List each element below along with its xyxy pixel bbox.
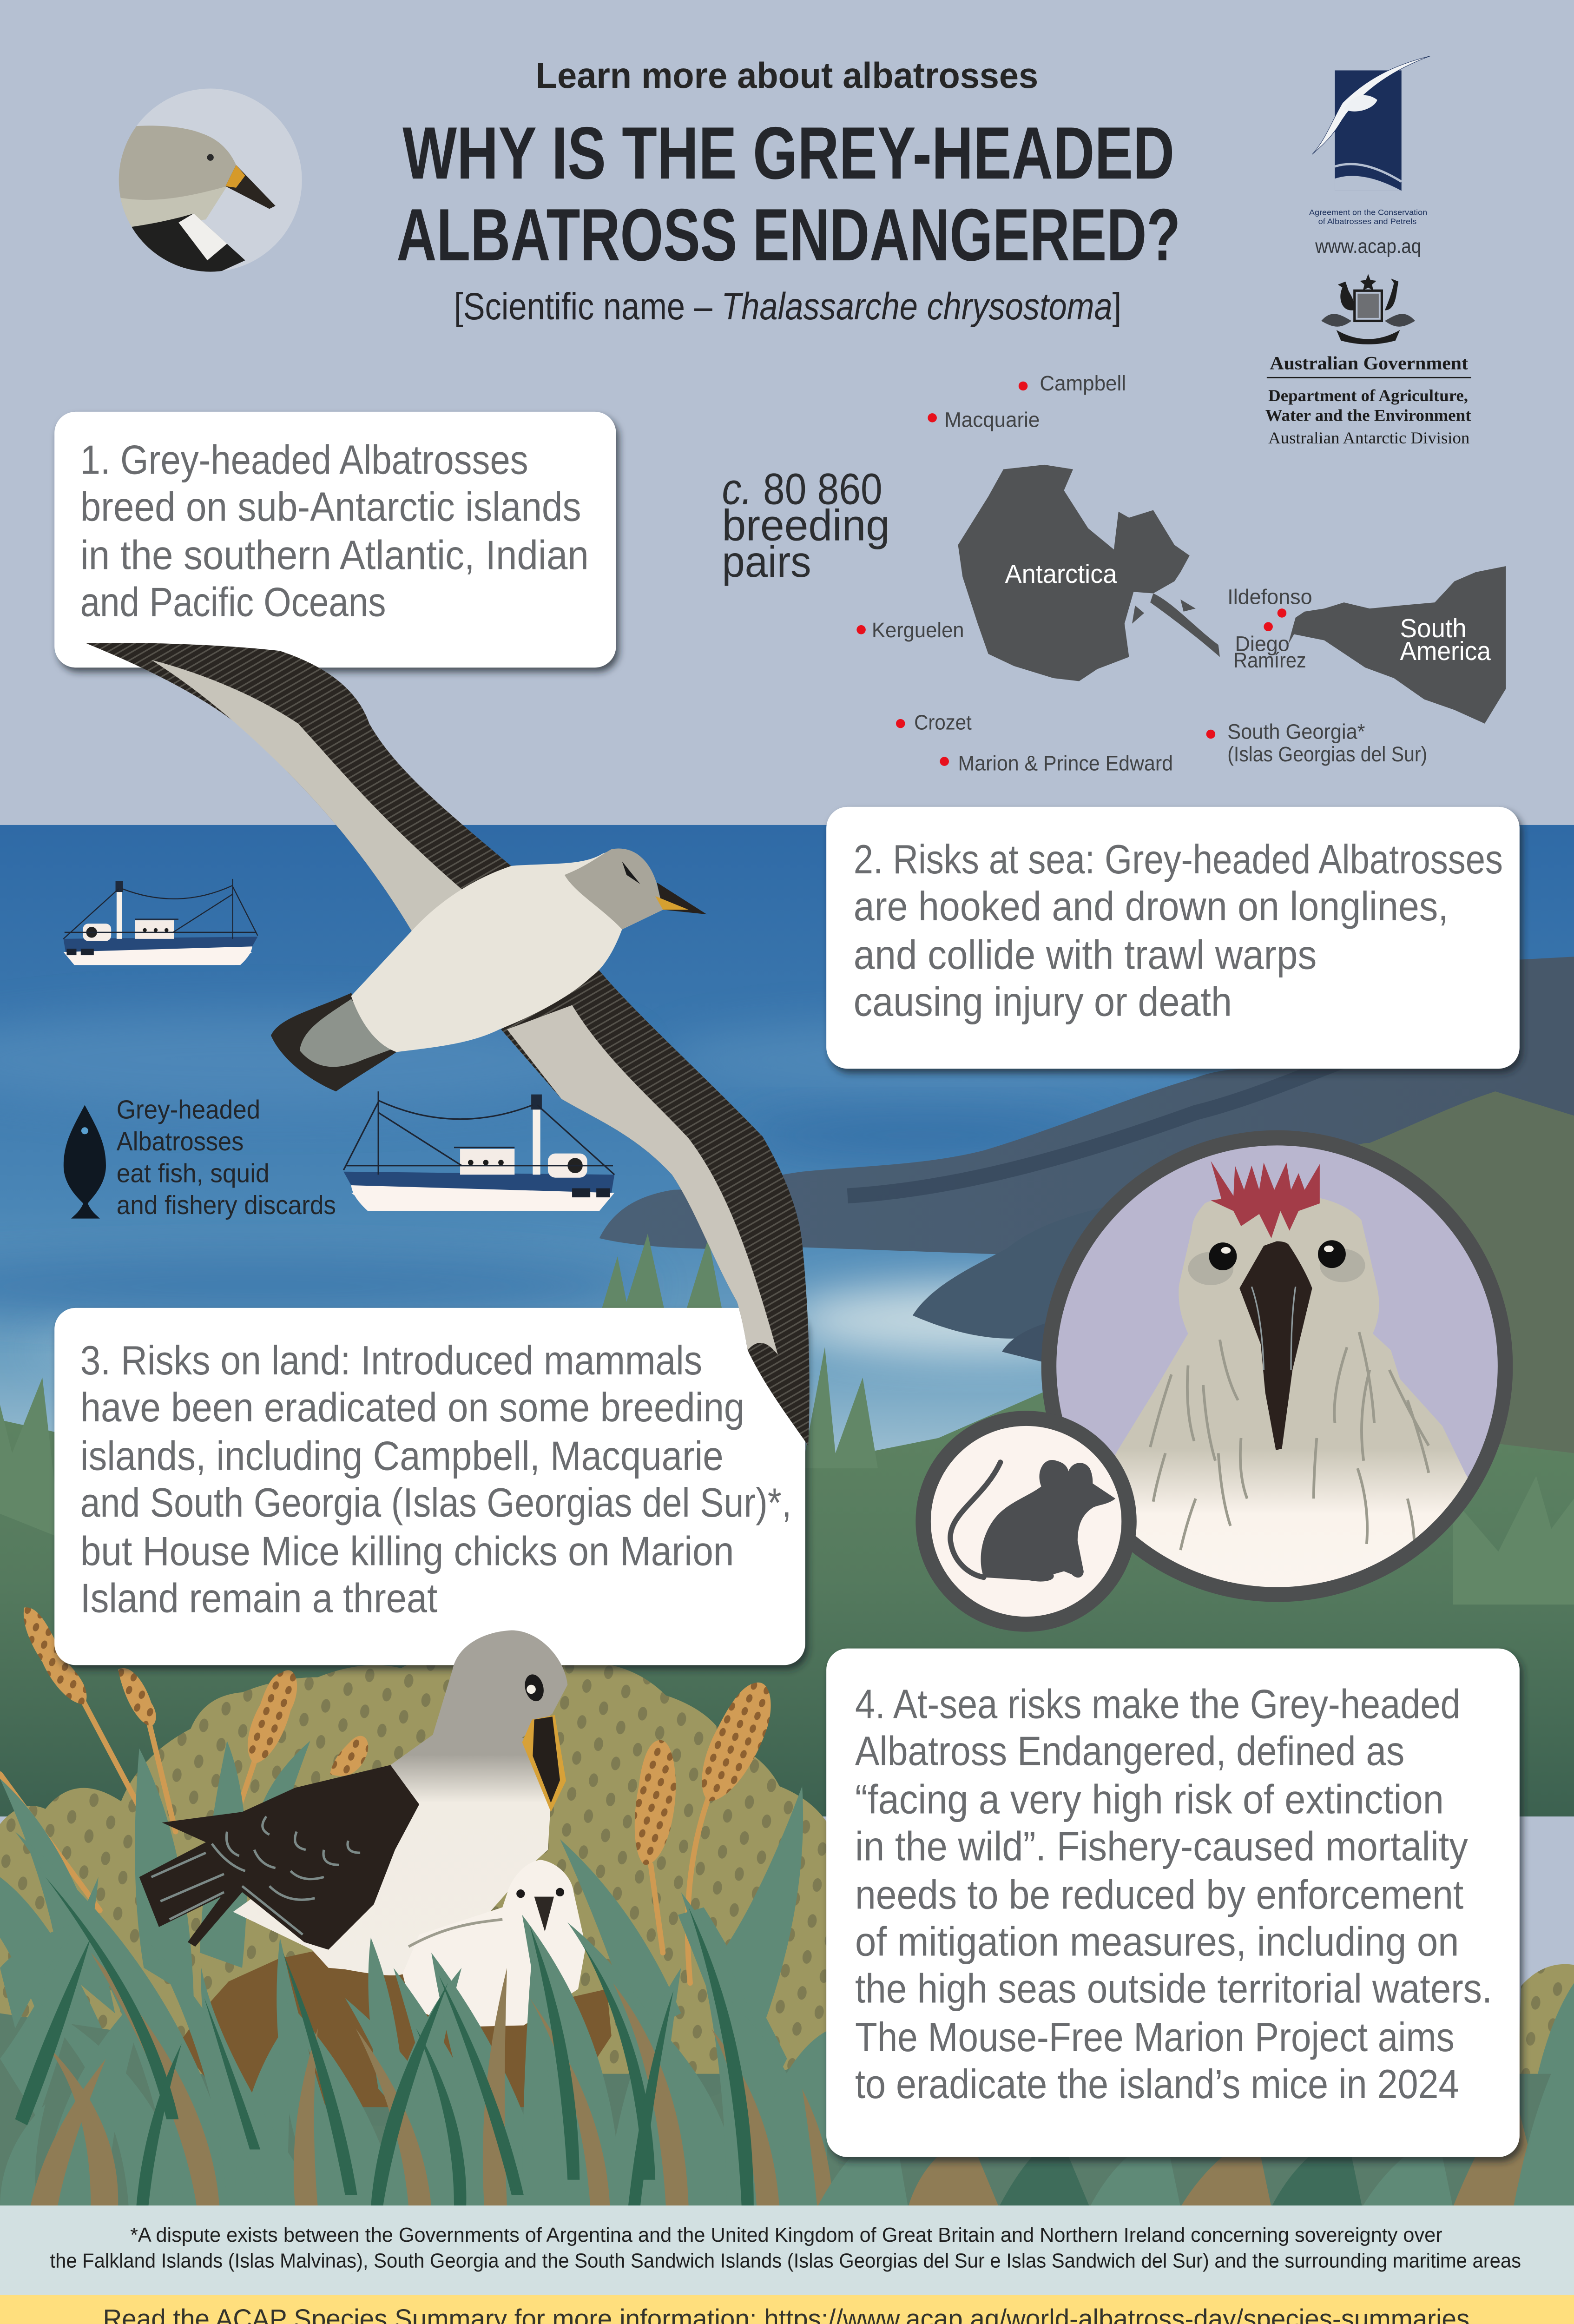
logo: Australian coat of arms [1321,274,1415,344]
logo: Australian Government text [1265,353,1471,447]
panel: text box 1, breeding range: breed on sub-Antarctic islands [80,483,581,529]
panel: text box 3, risks on land: but House Mice killing chicks on Marion [80,1528,734,1574]
panel: text box 4, endangered status: “facing a very high risk of extinction [855,1776,1444,1822]
illustration: back grass blades [0,1741,1574,2180]
panel: text box 2, risks at sea: and collide with trawl warps [854,931,1317,977]
subtitle: scientific name: [Scientific name – Thalassarche chrysostoma] [454,285,1121,328]
title [396,112,1180,276]
panel: footnote band: *A dispute exists between the Governments of Argentina and the United Kingdom of Great Britain and Northern Ireland concerning sovereignty over [130,2224,1442,2246]
panel: text box 4, endangered status: to eradicate the island’s mice in 2024 [855,2061,1459,2107]
illustration: large fishing vessel [343,1091,614,1211]
logo: ACAP: of Albatrosses and Petrels [1318,217,1416,226]
panel: text box 4, endangered status: needs to be reduced by enforcement [855,1872,1463,1918]
panel: text box 2, risks at sea: are hooked and drown on longlines, [854,883,1449,929]
logo: Australian Government text: Water and the Environment [1265,406,1471,424]
map: island markers and labels: Ramírez [1233,648,1306,672]
panel: text box 4, endangered status: Albatross Endangered, defined as [855,1728,1404,1774]
map: island markers and labels: South Georgia* [1227,720,1365,743]
map: island markers and labels [856,371,1427,775]
illustration: small fishing vessel [63,879,257,965]
panel: text box 3, risks on land: Island remain a threat [80,1575,437,1621]
panel: text box 3, risks on land: 3. Risks on land: Introduced mammals [80,1337,702,1383]
logo: Australian Government text: Australian Government [1270,353,1468,374]
panel: text box 4, endangered status [826,1649,1520,2157]
text: diet note: Grey-headed [117,1095,260,1125]
upper wing [86,643,514,931]
panel: text box 4, endangered status: The Mouse-Free Marion Project aims [855,2014,1455,2060]
map: South America [1288,566,1506,724]
title: ALBATROSS ENDANGERED? [396,193,1180,276]
body and head [351,851,663,1052]
mouse silhouette [981,1460,1115,1582]
panel: text box 3, risks on land: have been eradicated on some breeding [80,1384,744,1430]
map: island markers and labels: (Islas Georgias del Sur) [1227,742,1427,766]
text: breeding pairs count: c. 80 860 [722,465,882,514]
text: ACAP website: www.acap.aq [1315,235,1421,257]
tail [271,993,396,1091]
map: Antarctica: Antarctica [1005,559,1117,589]
eye [622,861,640,884]
panel: text box 4, endangered status: of mitigation measures, including on [855,1919,1459,1965]
beak [657,883,707,914]
mouse tail [950,1462,1001,1578]
map: South America: America [1400,636,1491,666]
illustration: chick [402,1860,586,2027]
illustration: green land [0,1234,1574,1816]
map: island markers and labels: Diego [1235,632,1290,655]
text: breeding pairs count: breeding [722,502,890,550]
map: island markers and labels: Marion & Prince Edward [958,752,1173,775]
map: island markers and labels: Kerguelen [872,618,964,642]
panel: text box 2, risks at sea: causing injury or death [854,978,1232,1024]
panel: text box 1, breeding range: 1. Grey-headed Albatrosses [80,436,528,482]
title: WHY IS THE GREY-HEADED [402,112,1174,194]
panel: text box 1, breeding range: in the southern Atlantic, Indian [80,532,589,578]
lower wing [501,969,810,1446]
red crest [1211,1161,1320,1238]
illustration: lower grass bed [0,2013,1574,2210]
text: diet note: and fishery discards [117,1190,336,1220]
logo: ACAP [1309,56,1430,226]
text: diet note [117,1095,336,1220]
panel: text box 4, endangered status: the high seas outside territorial waters. [855,1966,1492,2012]
icon: fish [64,1105,106,1219]
map: island markers and labels: Crozet [914,711,972,734]
illustration: distant rocky headlands [599,957,1574,1529]
text: diet note: eat fish, squid [117,1159,270,1188]
panel: text box 4, endangered status: 4. At-sea risks make the Grey-headed [855,1681,1461,1727]
panel: text box 1, breeding range [54,412,616,667]
panel: text box 4, endangered status: in the wild”. Fishery-caused mortality [855,1823,1468,1869]
map: island markers and labels: Macquarie [944,408,1040,431]
illustration: ocean [0,825,1574,1461]
map: South America: South [1400,614,1467,643]
illustration: adult albatross on nest [139,1631,567,1975]
panel: link band [0,2295,1574,2324]
panel: text box 3, risks on land: and South Georgia (Islas Georgias del Sur)*, [80,1479,791,1525]
map: island markers and labels: Ildefonso [1227,585,1312,608]
text: breeding pairs count: pairs [722,538,811,587]
panel: footnote band: the Falkland Islands (Islas Malvinas), South Georgia and the South Sandwich Islands (Islas Georgias del Sur e Islas Sandwich del Sur) and the surrounding maritime areas [50,2250,1521,2272]
illustration: chick portrait circle [1049,1138,1514,1604]
logo: Australian Government text: Department of Agriculture, [1268,386,1468,405]
panel: text box 3, risks on land [54,1308,805,1665]
panel: text box 1, breeding range: and Pacific Oceans [80,579,386,625]
panel: text box 2, risks at sea [826,807,1520,1069]
logo: ACAP: Agreement on the Conservation [1309,208,1427,217]
map: island markers and labels: Campbell [1040,371,1126,395]
panel: text box 3, risks on land: islands, including Campbell, Macquarie [80,1433,724,1479]
text: diet note: Albatrosses [117,1127,244,1156]
illustration: nest mound [178,1950,612,2107]
icon: mouse circle [923,1419,1129,1624]
illustration: orange reed seed heads [0,1607,771,1983]
logo: Australian Government text: Australian Antarctic Division [1268,429,1469,447]
illustration: flying albatross [86,643,810,1446]
panel: footnote band [0,2205,1574,2295]
illustration: front grass blades [0,1832,832,2207]
heading: learn more: Learn more about albatrosses [536,55,1038,96]
map: Antarctica [958,465,1220,681]
icon: albatross head portrait [115,88,303,276]
illustration: olive tussock bushes with dots [0,1656,1574,2210]
illustration: bottom grass tufts right [817,2028,1574,2207]
text: breeding pairs count [722,465,890,587]
